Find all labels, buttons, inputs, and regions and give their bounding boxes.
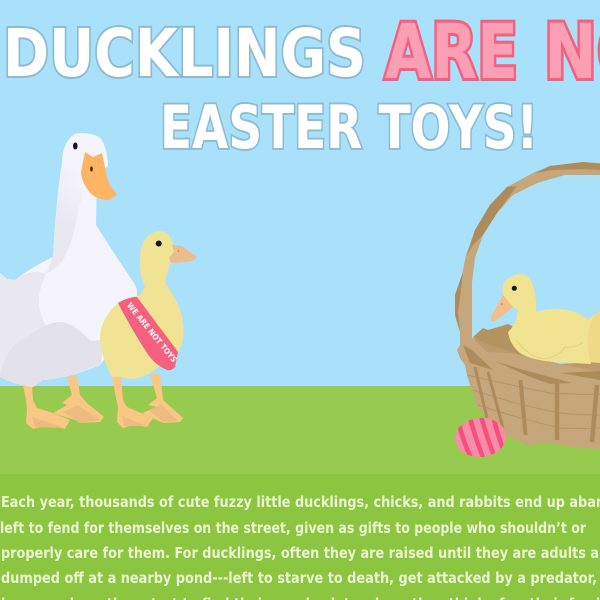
handle dark strands — [455, 162, 600, 332]
sash — [118, 297, 178, 370]
title — [3, 7, 600, 163]
text band background — [0, 474, 600, 600]
duckling body — [100, 231, 184, 379]
duck wing — [0, 322, 104, 387]
basket rim shading — [463, 345, 600, 384]
illustration: adult white duck — [0, 133, 137, 429]
egg base — [454, 416, 507, 459]
duckling eye — [156, 240, 162, 246]
duckling legs — [112, 373, 183, 428]
body paragraph — [0, 493, 600, 600]
basket duckling eye — [512, 286, 517, 291]
duck body — [0, 133, 137, 387]
basket body — [457, 338, 600, 449]
duckling foot shading — [122, 404, 178, 426]
duck nostril — [90, 166, 93, 172]
second duckling in basket — [586, 310, 600, 363]
basket vertical slats — [475, 367, 597, 442]
basket rim band — [473, 338, 600, 372]
illustration: striped easter egg — [455, 418, 506, 457]
duck legs — [23, 375, 104, 429]
duck foot shading — [32, 405, 100, 428]
duck eye — [73, 142, 78, 150]
basket duckling beak — [491, 295, 513, 322]
basket duckling nostril — [501, 303, 503, 305]
duck beak — [81, 152, 117, 200]
duck side shadow — [0, 272, 46, 377]
sash text: WE ARE NOT TOYS — [125, 301, 179, 364]
basket weave lines — [467, 375, 600, 428]
basket nest interior — [473, 324, 580, 362]
basket handle — [455, 162, 600, 355]
sky background — [0, 0, 600, 388]
illustration: basket with ducklings — [455, 162, 600, 449]
grass — [0, 386, 600, 475]
basket duckling body — [503, 274, 594, 364]
duck neck shading — [46, 168, 83, 274]
egg stripes — [458, 418, 504, 457]
title word: are: ARE — [385, 7, 518, 96]
duckling beak — [169, 245, 197, 263]
basket duckling wing line — [517, 341, 582, 359]
illustration: duckling with sash — [100, 231, 197, 428]
duckling nostril — [178, 250, 179, 252]
title word: ducklings: DUCKLINGS — [3, 15, 366, 92]
